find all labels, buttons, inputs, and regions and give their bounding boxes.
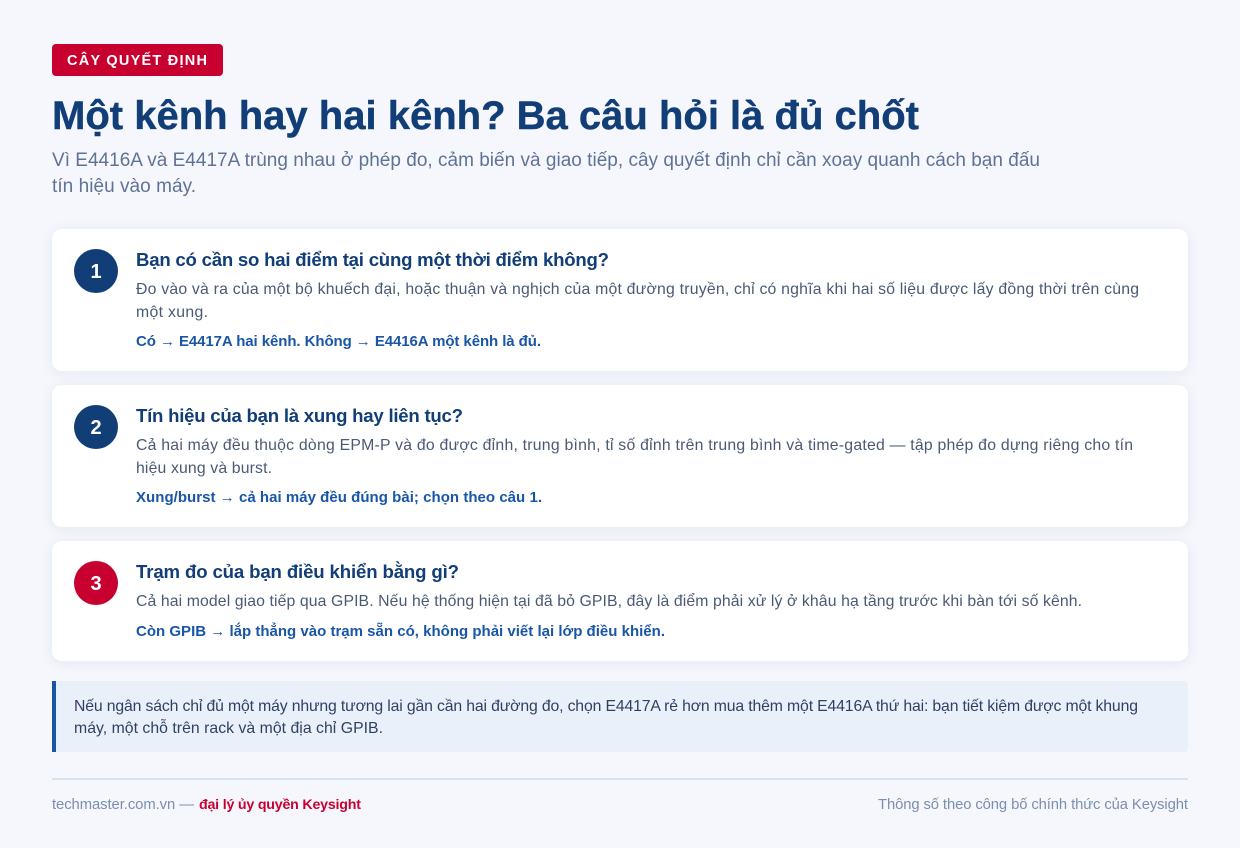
icon: number 2 badge (74, 405, 118, 449)
title: Một kênh hay hai kênh? Ba câu hỏi là đủ chốt (52, 94, 919, 138)
panel: question 1 (52, 229, 1188, 371)
footer: source left (52, 797, 361, 813)
panel: question 3 (52, 541, 1188, 661)
question 1 explanation (136, 281, 1139, 321)
question 1 verdict: Có → E4417A hai kênh. Không → E4416A một kênh là đủ. (136, 333, 541, 350)
header badge: CÂY QUYẾT ĐỊNH (67, 51, 207, 69)
question 3 explanation: Cả hai model giao tiếp qua GPIB. Nếu hệ thống hiện tại đã bỏ GPIB, đây là điểm phải xử lý ở khâu hạ tầng trước khi bàn tới số kênh. (136, 592, 1082, 610)
question 2 explanation: hiệu xung và burst. (136, 460, 272, 477)
header badge (52, 44, 223, 76)
question 2 verdict: Xung/burst → cả hai máy đều đúng bài; chọn theo câu 1. (136, 489, 542, 506)
question 2 heading: Tín hiệu của bạn là xung hay liên tục? (136, 405, 463, 426)
footer: source note right: Thông số theo công bố chính thức của Keysight (878, 797, 1188, 813)
subtitle: tín hiệu vào máy. (52, 176, 196, 197)
question 2 explanation (136, 437, 1133, 477)
icon: number 1 badge: 1 (90, 261, 102, 283)
question 2 explanation: Cả hai máy đều thuộc dòng EPM-P và đo được đỉnh, trung bình, tỉ số đỉnh trên trung bình và time-gated — tập phép đo dựng riêng cho tín (136, 437, 1133, 454)
question 3 verdict: Còn GPIB → lắp thẳng vào trạm sẵn có, không phải viết lại lớp điều khiển. (136, 622, 665, 640)
icon: number 2 badge: 2 (90, 417, 102, 439)
question 1 explanation: Đo vào và ra của một bộ khuếch đại, hoặc thuận và nghịch của một đường truyền, chỉ có nghĩa khi hai số liệu được lấy đồng thời trên cùng (136, 281, 1139, 298)
footer: source left: đại lý ủy quyền Keysight (199, 797, 361, 813)
question 1 explanation: một xung. (136, 304, 208, 321)
subtitle (52, 150, 1040, 197)
icon: number 3 badge (74, 561, 118, 605)
footer: source left: techmaster.com.vn — (52, 797, 194, 813)
icon: number 3 badge: 3 (90, 573, 102, 595)
question 1 heading: Bạn có cần so hai điểm tại cùng một thời điểm không? (136, 249, 609, 270)
callout (52, 681, 1188, 752)
subtitle: Vì E4416A và E4417A trùng nhau ở phép đo, cảm biến và giao tiếp, cây quyết định chỉ cần xoay quanh cách bạn đấu (52, 150, 1040, 171)
callout: Nếu ngân sách chỉ đủ một máy nhưng tương lai gần cần hai đường đo, chọn E4417A rẻ hơn mua thêm một E4416A thứ hai: bạn tiết kiệm được một khung (74, 698, 1138, 715)
icon: number 1 badge (74, 249, 118, 293)
callout: máy, một chỗ trên rack và một địa chỉ GPIB. (74, 718, 383, 737)
question 3 heading: Trạm đo của bạn điều khiển bằng gì? (136, 561, 459, 582)
panel: question 2 (52, 385, 1188, 527)
